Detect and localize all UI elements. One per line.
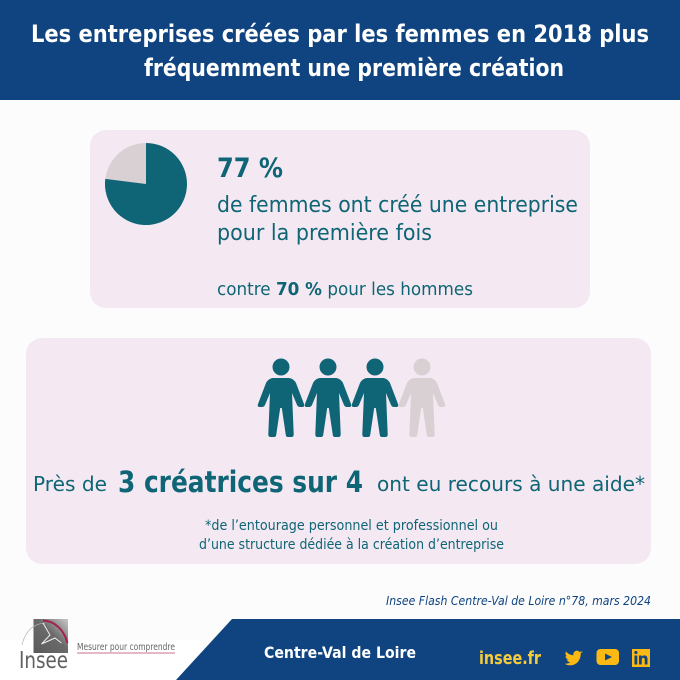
logo: Insee: Mesurer pour comprendre [77,642,175,653]
footer band [176,619,680,680]
white corner behind logo [0,640,200,680]
header band with title: fréquemment une première création [144,54,564,82]
website: insee.fr [479,649,541,669]
text: description: pour la première fois [217,221,432,246]
person 2 [305,358,351,437]
footnote: d’une structure dédiée à la création d’entreprise [199,537,504,553]
pictogram: 3 of 4 people [258,358,445,437]
source: Insee Flash Centre-Val de Loire n°78, mars 2024 [386,594,651,608]
panel: first-time creators [90,130,590,308]
icon: youtube [596,649,619,665]
statistic: 77 %: 77 % [217,153,283,184]
text: près de 3 créatrices sur 4: Près de [33,472,107,496]
logo: Insee: Insee [19,648,68,674]
person 4 [399,358,445,437]
panel: support [26,338,651,564]
icon: linkedin [632,649,650,667]
text: description: de femmes ont créé une entreprise [217,193,578,218]
footer region name: Centre-Val de Loire [264,643,416,662]
text: près de 3 créatrices sur 4 [33,465,645,499]
text: près de 3 créatrices sur 4: 3 créatrices sur 4 [118,465,363,499]
pie chart: 77 % [105,143,187,225]
footnote: *de l’entourage personnel et professionnel ou [205,518,498,534]
footnote [199,518,504,553]
icon: twitter [565,651,583,665]
person 3 [352,358,398,437]
text: description [217,193,578,246]
text: près de 3 créatrices sur 4: ont eu recours à une aide* [377,472,645,496]
header band with title [0,0,680,100]
logo: Insee [19,619,175,674]
person 1 [258,358,304,437]
text: comparison with men: contre 70 % pour les hommes [217,280,473,300]
